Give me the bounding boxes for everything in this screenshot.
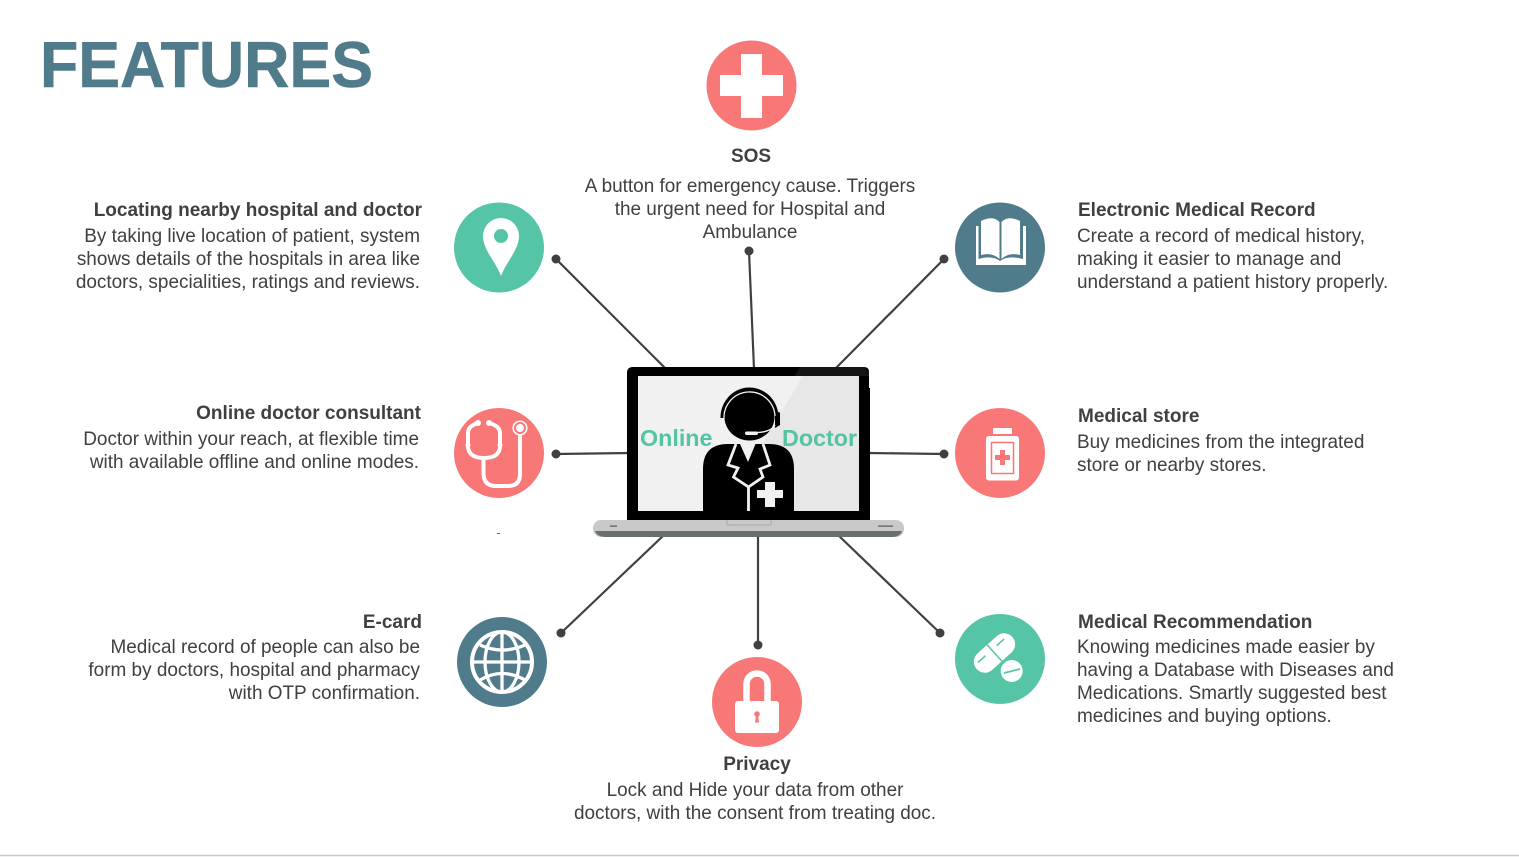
icon: stethoscope	[454, 408, 544, 498]
doctor figure	[703, 388, 794, 512]
text: locating nearby hospital and doctor: By taking live location of patient, system	[84, 226, 420, 247]
text: medical recommendation: medicines and buying options.	[1077, 706, 1332, 727]
text: e-card: form by doctors, hospital and pharmacy	[88, 660, 421, 681]
text: e-card: E-card	[363, 612, 422, 633]
icon: padlock	[712, 657, 802, 747]
text: locating nearby hospital and doctor: doctors, specialities, ratings and reviews.	[76, 272, 420, 293]
text: online doctor consultant: Online doctor consultant	[196, 403, 422, 424]
text: SOS: SOS	[731, 146, 771, 167]
central laptop illustration	[593, 367, 904, 537]
icon: medicine bottle	[955, 408, 1045, 498]
text: electronic medical record	[1077, 200, 1388, 293]
text: electronic medical record: making it easier to manage and	[1077, 249, 1341, 270]
text: privacy	[574, 754, 936, 824]
icon: SOS cross	[706, 40, 796, 130]
text: medical recommendation	[1077, 612, 1394, 727]
text: locating nearby hospital and doctor: Locating nearby hospital and doctor	[94, 200, 423, 221]
text: privacy: Lock and Hide your data from other	[607, 780, 903, 801]
screen label: Doctor: Doctor	[782, 425, 857, 451]
text: medical store: store or nearby stores.	[1077, 455, 1266, 476]
icon: pills	[955, 614, 1045, 704]
text: medical recommendation: having a Database with Diseases and	[1077, 660, 1394, 681]
text: electronic medical record: Create a record of medical history,	[1077, 226, 1365, 247]
text: medical store	[1077, 406, 1364, 476]
text: e-card	[88, 612, 422, 704]
connector lines	[552, 246, 948, 650]
screen label: Online: Online	[640, 425, 713, 451]
text: electronic medical record: Electronic Medical Record	[1078, 200, 1316, 221]
text: medical recommendation: Knowing medicines made easier by	[1077, 637, 1375, 658]
text: privacy: doctors, with the consent from treating doc.	[574, 803, 936, 824]
icon: map pin	[454, 202, 544, 292]
text: medical store: Medical store	[1078, 406, 1199, 427]
text: privacy: Privacy	[723, 754, 791, 775]
text: SOS: A button for emergency cause. Triggers	[585, 176, 915, 197]
text: locating nearby hospital and doctor	[76, 200, 423, 293]
icon: globe	[457, 617, 547, 707]
text: SOS: the urgent need for Hospital and	[615, 199, 885, 220]
text: SOS: Ambulance	[703, 222, 797, 243]
title: FEATURES	[40, 28, 373, 101]
text: online doctor consultant	[83, 403, 422, 473]
text: locating nearby hospital and doctor: shows details of the hospitals in area like	[77, 249, 420, 270]
text: medical recommendation: Medical Recommendation	[1078, 612, 1312, 633]
text: online doctor consultant: Doctor within your reach, at flexible time	[83, 429, 419, 450]
text: electronic medical record: understand a patient history properly.	[1077, 272, 1388, 293]
text: medical store: Buy medicines from the integrated	[1077, 432, 1364, 453]
text: online doctor consultant: with available offline and online modes.	[89, 452, 419, 473]
icon: open book	[955, 202, 1045, 292]
text: medical recommendation: Medications. Smartly suggested best	[1077, 683, 1387, 704]
text: e-card: with OTP confirmation.	[228, 683, 420, 704]
text: SOS	[585, 146, 915, 243]
text: e-card: Medical record of people can also be	[110, 637, 420, 658]
